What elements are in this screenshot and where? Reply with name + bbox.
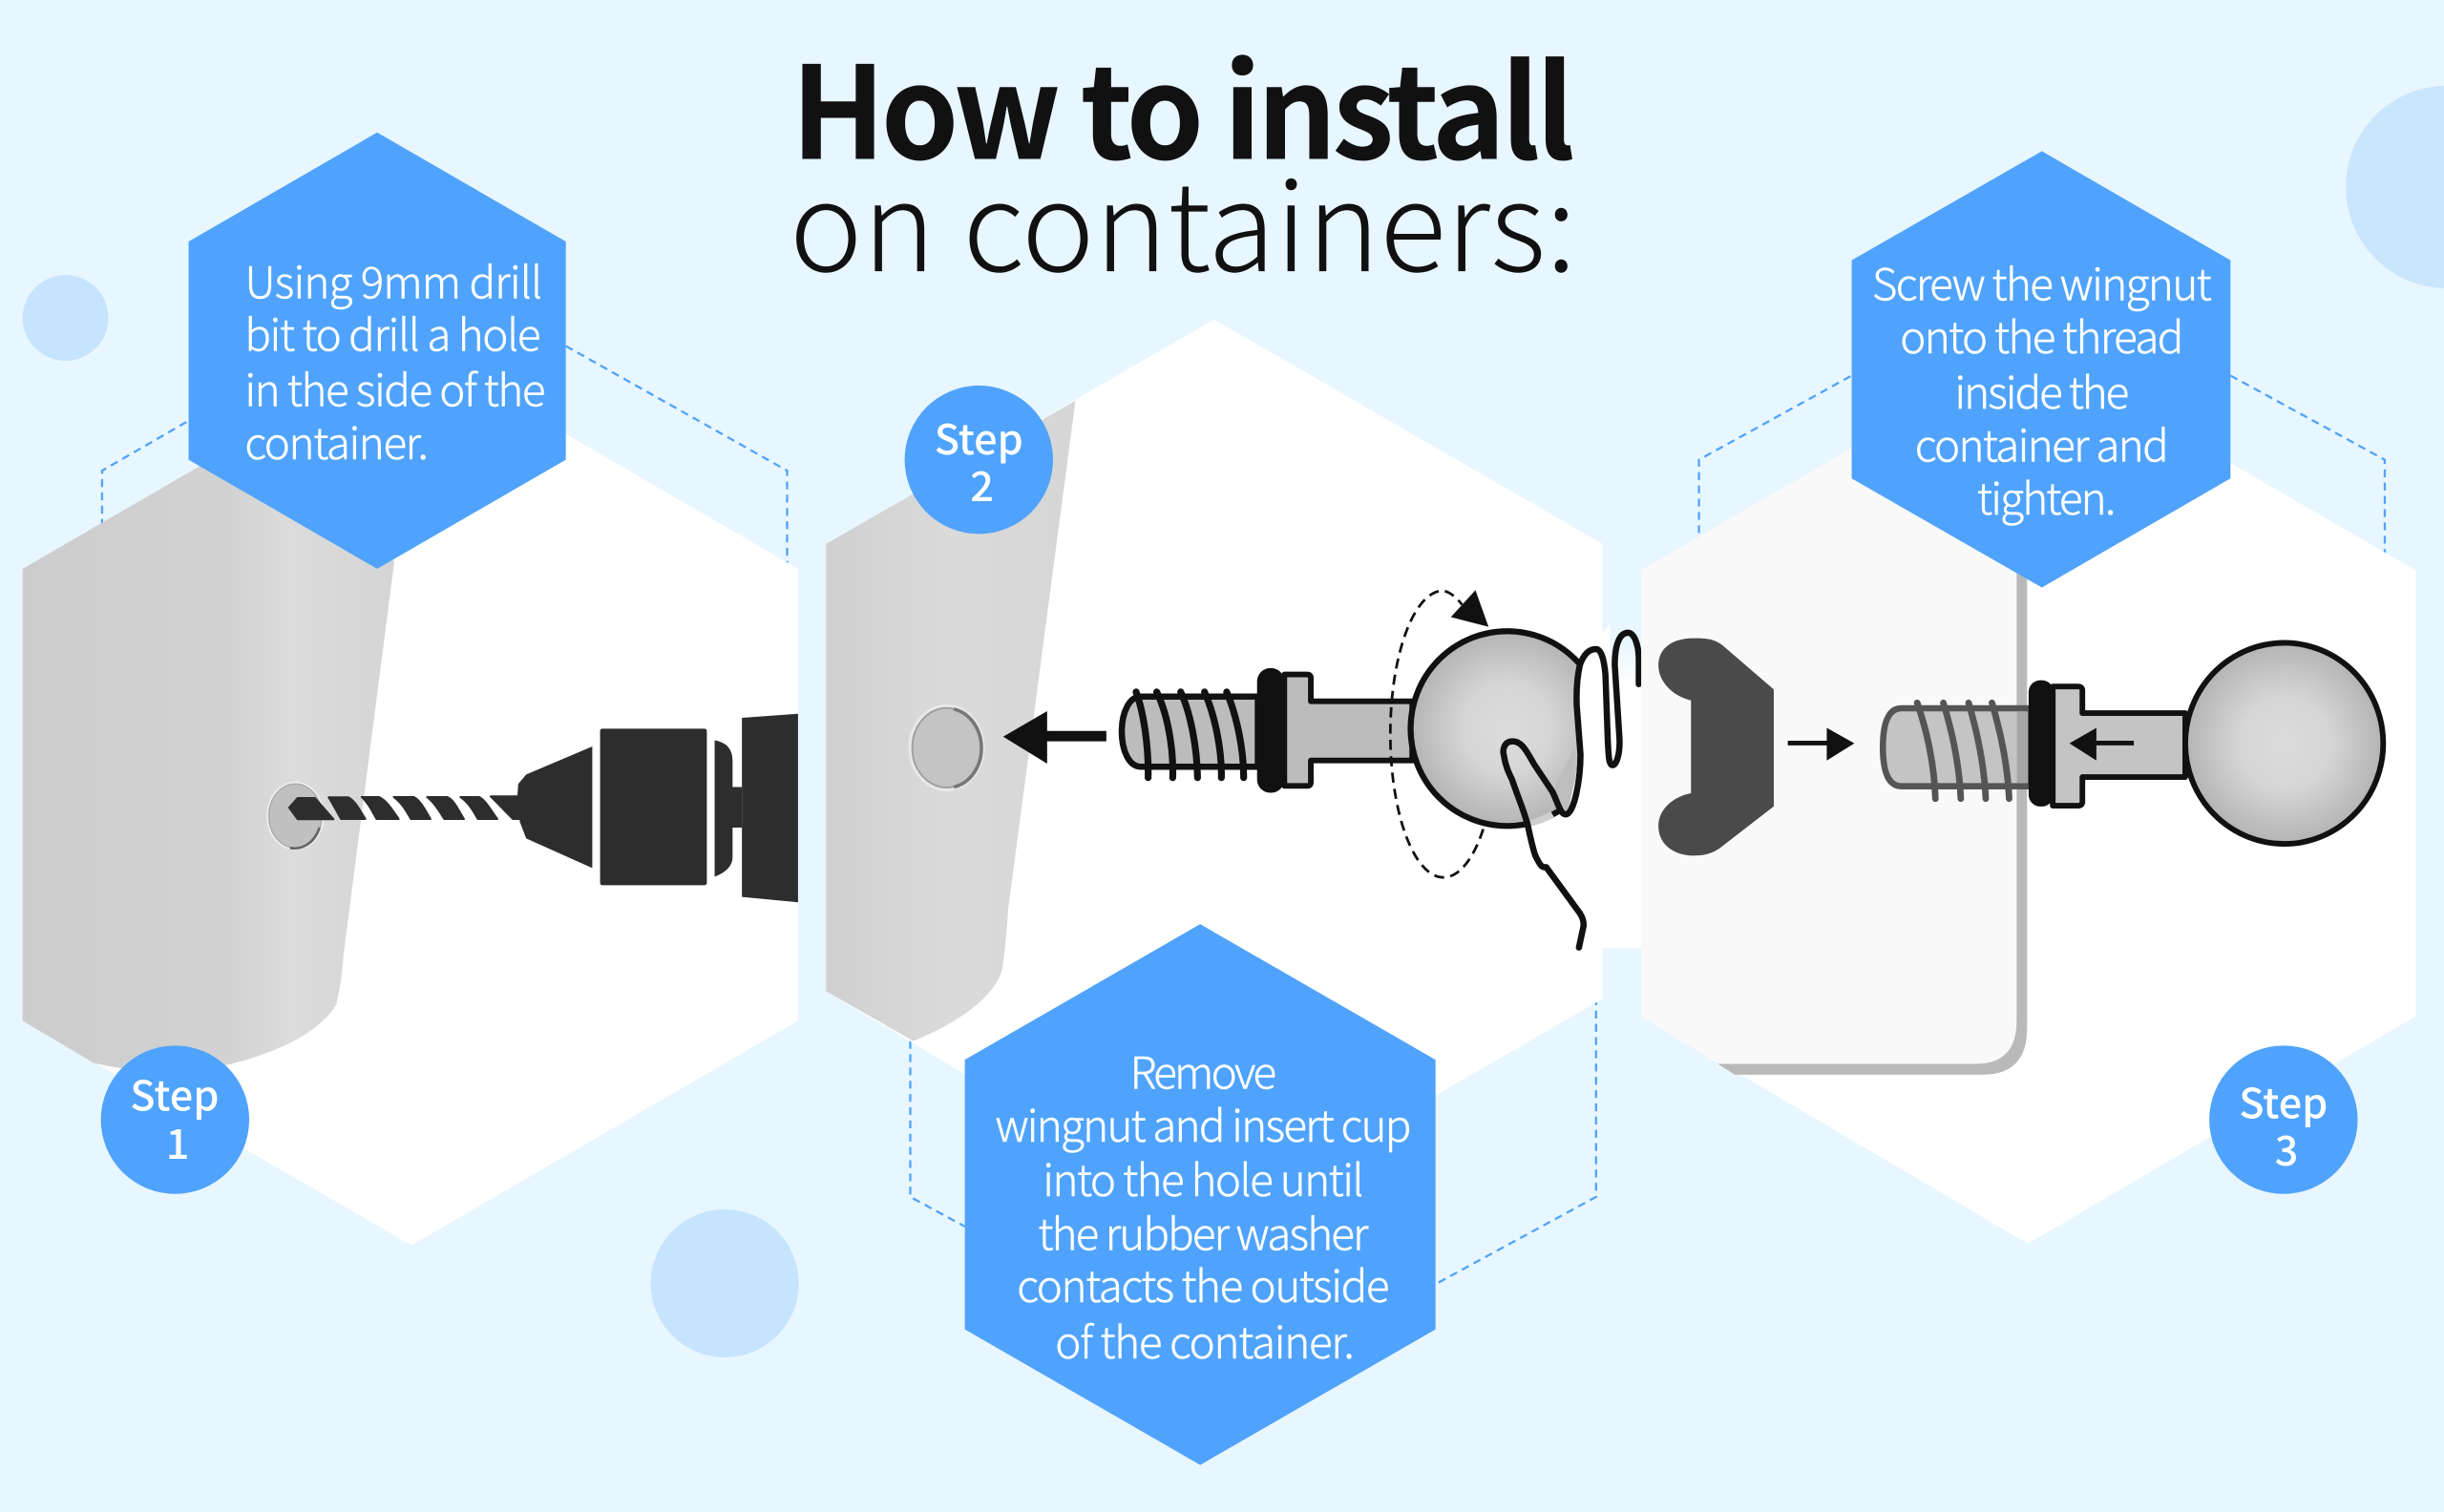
badge: step 3: Step [2239, 1071, 2328, 1130]
hole: step 2 [909, 704, 985, 791]
dashed connectors: step 3 [1699, 375, 2385, 554]
bolt: step 2 [1122, 668, 1412, 793]
hexagon background: step 2 [826, 320, 1602, 1224]
callout: step 1 instructions: bit to drill a hole [244, 301, 541, 364]
wingnut [1658, 639, 1774, 855]
arrow: wingnut direction [1788, 727, 1854, 761]
drilled hole [266, 782, 325, 850]
callout: step 3 instructions: Screw the wingnut [1872, 250, 2212, 313]
rubber washer: step 3 [2029, 681, 2054, 807]
callout: step 1 instructions: container. [244, 410, 429, 472]
decorative circle: top right [2346, 86, 2444, 288]
arrow: insert direction [1003, 711, 1106, 764]
callout: step 2 instructions: the rubber washer [1038, 1200, 1369, 1263]
container wall: step 2 [826, 401, 1076, 1041]
badge: step 2: 2 [970, 454, 994, 514]
panel: step 2 [826, 320, 1641, 1224]
hexagon background: step 3 [1641, 346, 2416, 1244]
container edge [1717, 352, 2027, 1075]
arrowhead: rotation [1451, 590, 1488, 627]
callout: step 3 instructions: inside the [1954, 359, 2129, 422]
badge: step 1: 1 [166, 1112, 189, 1171]
dashed rotation path [1390, 591, 1484, 877]
badge: step 1: Step [130, 1063, 219, 1123]
bolt inside container [1883, 703, 2029, 799]
badge: step 1 [101, 1045, 249, 1194]
drill bit [289, 796, 520, 819]
container interior [1641, 352, 2017, 1063]
title [790, 10, 1576, 307]
badge: step 2: Step [935, 408, 1023, 467]
dashed connectors: step 1 [102, 346, 787, 569]
callout: step 3 instructions: tighten. [1977, 465, 2116, 528]
ball handle: step 2 [1411, 631, 1604, 826]
badge: step 3 [2209, 1045, 2358, 1194]
callout: step 2 instructions: wingnut and insert cup [995, 1092, 1411, 1155]
callout: step 3 instructions: container and [1915, 411, 2169, 474]
callout: step 1 instructions: in the side of the [244, 356, 545, 419]
callout: step 2 instructions: Remove [1130, 1039, 1276, 1102]
callout: step 2 instructions: of the container. [1055, 1309, 1355, 1372]
title: on containers: [790, 129, 1576, 307]
drill chuck [517, 714, 798, 902]
arrow: bolt direction [2070, 727, 2134, 761]
callout: step 1 instructions: Using 9mm drill [244, 249, 542, 312]
title: How to install [791, 10, 1575, 197]
panel: step 3 [1641, 346, 2416, 1244]
dashed connectors: step 2 [910, 998, 1596, 1284]
hexagon background: step 1 [23, 345, 798, 1245]
decorative circle: bottom [651, 1209, 799, 1357]
badge: step 3: 3 [2275, 1119, 2298, 1178]
hand [1504, 623, 1639, 948]
callout: step 2 instructions [965, 924, 1436, 1465]
container wall: step 1 [23, 465, 394, 1071]
callout: step 3 instructions [1852, 151, 2230, 588]
callout: step 3 instructions: onto the thread [1900, 304, 2183, 367]
decorative circle: left [23, 275, 108, 361]
callout: step 2 instructions: into the hole until [1043, 1146, 1364, 1209]
white bridge between panels [1602, 642, 1641, 948]
bolt stem and flange: step 3 [2053, 686, 2185, 806]
callout: step 1 instructions [189, 133, 566, 569]
callout: step 2 instructions: contacts the outside [1017, 1252, 1390, 1315]
ball handle: step 3 [2185, 642, 2383, 844]
badge: step 2 [905, 386, 1053, 534]
panel: step 1 [23, 345, 798, 1245]
